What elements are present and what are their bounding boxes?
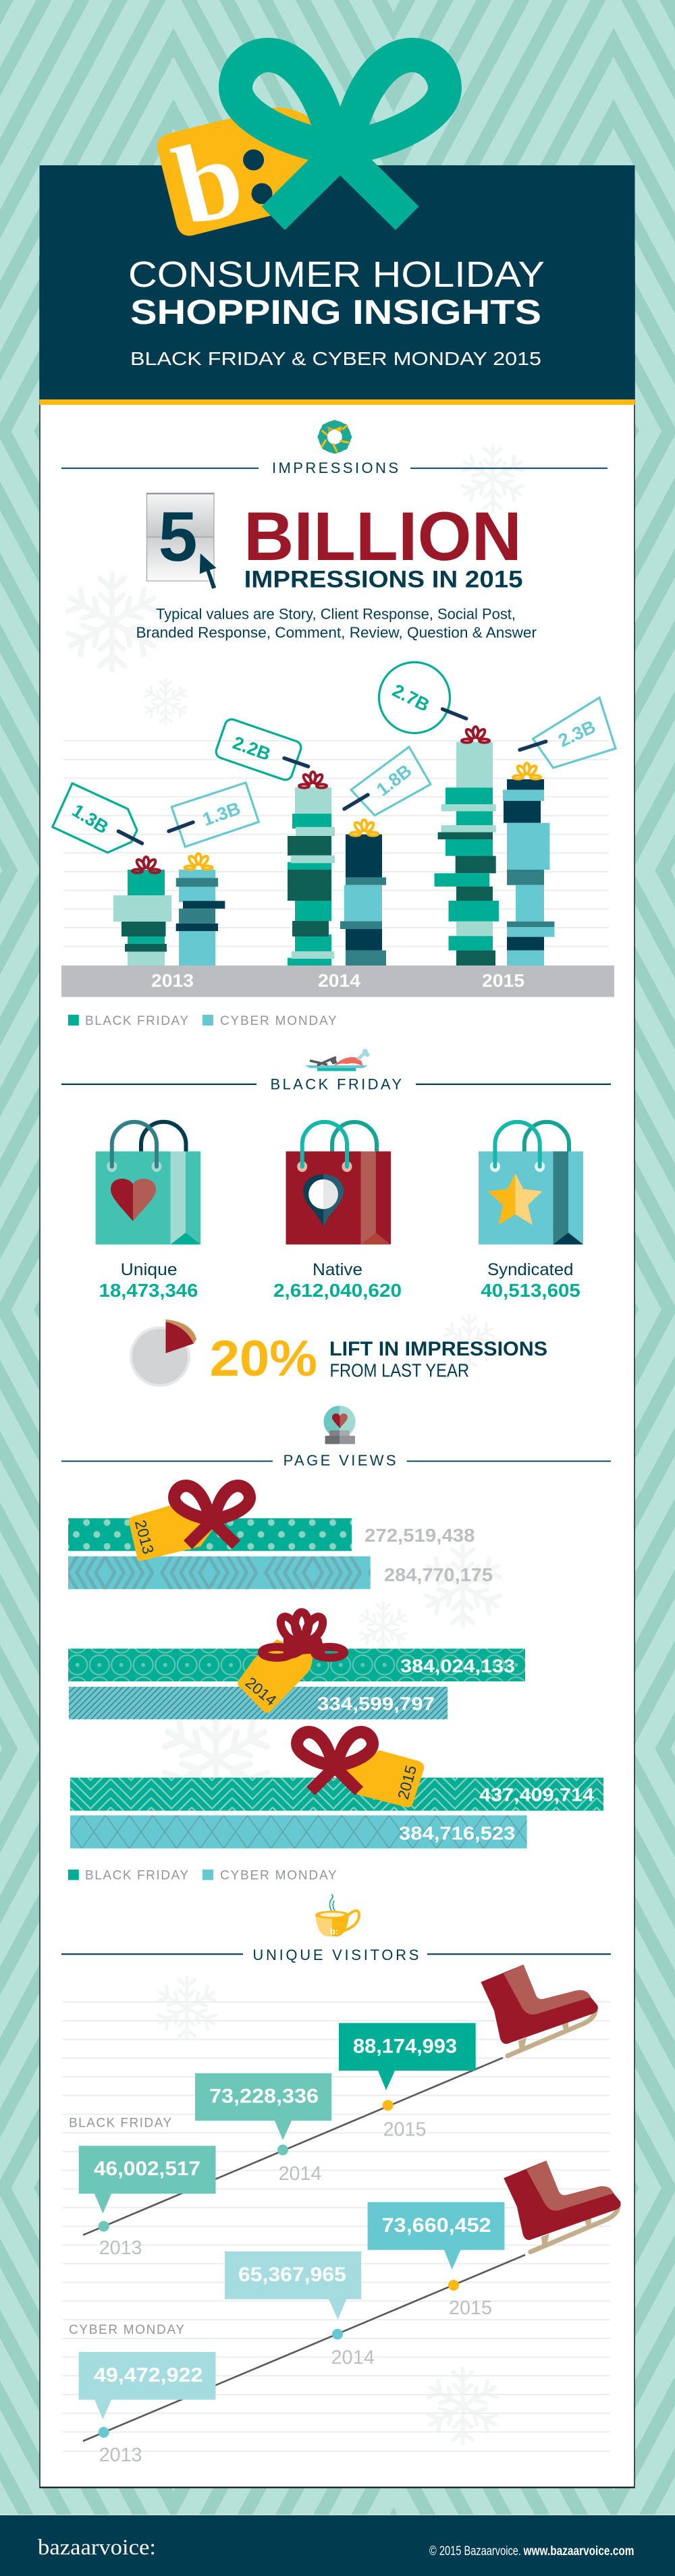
stat: unique: Unique <box>121 1260 178 1279</box>
icon: bag unique <box>96 1122 200 1244</box>
year labels: cyber monday: 2015 <box>449 2297 492 2319</box>
footer logo text: bazaarvoice: <box>38 2536 156 2560</box>
title: SHOPPING INSIGHTS <box>130 293 541 331</box>
tag: 2013 cyber monday 1.3B <box>169 783 259 847</box>
year axis band: 2014 <box>318 970 360 990</box>
legend: impressions chart: BLACK FRIDAY <box>85 1014 188 1028</box>
icon: 2015 red bow <box>291 1726 379 1795</box>
value: 2014 cyber monday: 334,599,797 <box>317 1693 435 1714</box>
icon: snow globe <box>324 1406 355 1444</box>
stack: 2013 black friday <box>113 870 171 965</box>
description text <box>136 606 537 641</box>
callout: 2015 black friday: 88,174,993 <box>353 2035 457 2057</box>
tag: 2015 black friday 2.7B <box>379 663 466 733</box>
tag: 2015 cyber monday 2.3B <box>520 698 616 768</box>
stat: 20 percent lift: 20% <box>210 1330 317 1387</box>
stack: 2015 cyber monday <box>503 779 554 965</box>
callout: 2015 cyber monday <box>368 2202 504 2270</box>
big stat: 5 billion: BILLION <box>244 498 522 575</box>
stat: native: Native <box>313 1260 362 1279</box>
callout: 2015 cyber monday: 73,660,452 <box>382 2214 491 2237</box>
icon: pie <box>130 1320 196 1387</box>
value: 2013 cyber monday: 284,770,175 <box>384 1565 493 1586</box>
stat: native: 2,612,040,620 <box>273 1280 402 1301</box>
icon: coffee cup: b: <box>330 1926 338 1936</box>
tag: 2013 cyber monday 1.3B: 1.3B <box>200 798 243 830</box>
tag: 2014: 2014 <box>242 1673 280 1709</box>
stack: 2014 black friday <box>288 787 335 965</box>
tag: 2013 <box>129 1505 216 1561</box>
small bows on stacks <box>132 727 541 873</box>
callout: 2015 black friday <box>339 2023 476 2090</box>
heading: page views: PAGE VIEWS <box>284 1452 396 1469</box>
logo gift tag <box>157 107 344 250</box>
description text: Branded Response, Comment, Review, Question & Answer <box>136 624 537 641</box>
icon: flip counter 5: 5 <box>159 498 197 576</box>
legend: impressions chart: CYBER MONDAY <box>220 1014 337 1028</box>
bar: 2014 black friday <box>68 1649 525 1681</box>
year labels: cyber monday: 2013 <box>99 2444 142 2466</box>
tag: 2013 black friday 1.3B: 1.3B <box>69 800 112 838</box>
website: www.bazaarvoice.com <box>523 2544 634 2558</box>
year labels: black friday: 2013 <box>99 2237 142 2259</box>
stat: syndicated <box>481 1260 580 1301</box>
icon: 2014 red bow <box>262 1613 344 1659</box>
background snowflakes <box>64 446 525 2443</box>
heading: black friday: BLACK FRIDAY <box>270 1076 402 1093</box>
label: black friday: BLACK FRIDAY <box>69 2117 171 2131</box>
icon: skate cyber monday <box>504 2160 621 2252</box>
tag: 2014 cyber monday 1.8B <box>344 747 431 816</box>
icon: bag native <box>286 1122 391 1244</box>
footer bar <box>0 2515 675 2576</box>
tag: 2015 cyber monday 2.3B: 2.3B <box>556 717 599 751</box>
header panel <box>39 165 634 405</box>
year axis band <box>61 965 614 997</box>
stat: syndicated: 40,513,605 <box>481 1280 580 1301</box>
legend: page views <box>68 1869 337 1883</box>
value: 2015 black friday: 437,409,714 <box>479 1784 594 1805</box>
stack: 2014 cyber monday <box>340 835 386 965</box>
panel: white content card <box>39 256 634 2488</box>
icon: skate black friday <box>481 1965 598 2056</box>
stat: unique: 18,473,346 <box>99 1280 198 1301</box>
tag: 2015: 2015 <box>394 1764 420 1801</box>
tag: 2014 <box>238 1640 313 1713</box>
callout: 2013 black friday: 46,002,517 <box>94 2158 200 2180</box>
tag: 2014 cyber monday 1.8B: 1.8B <box>373 760 416 800</box>
bar: 2014 cyber monday <box>69 1687 448 1719</box>
bar: 2015 cyber monday <box>70 1816 527 1849</box>
callout: 2014 black friday <box>195 2073 331 2140</box>
icon: coffee cup <box>315 1895 359 1936</box>
bar: 2013 black friday <box>68 1518 352 1551</box>
value: 2015 cyber monday: 384,716,523 <box>399 1823 515 1843</box>
callout: 2013 black friday <box>79 2146 216 2214</box>
tag: 2014 black friday 2.2B <box>214 717 308 782</box>
title: CONSUMER HOLIDAY <box>128 254 545 295</box>
icon: bag syndicated <box>479 1122 583 1244</box>
stat: unique <box>99 1260 198 1301</box>
icon: flip counter 5 <box>147 493 217 589</box>
icon: wreath <box>317 420 352 453</box>
callout: 2013 cyber monday <box>79 2352 216 2419</box>
heading: impressions: IMPRESSIONS <box>272 459 398 476</box>
tag: 2013: 2013 <box>132 1518 157 1556</box>
stat: 20 percent lift: FROM LAST YEAR <box>329 1360 469 1380</box>
tag: 2015 black friday 2.7B: 2.7B <box>389 680 433 716</box>
icon: teal bow <box>219 38 462 230</box>
value: 2014 black friday: 384,024,133 <box>400 1655 515 1676</box>
year labels: black friday: 2015 <box>383 2119 426 2140</box>
chart: impressions gift stacks <box>53 663 616 997</box>
year axis band: 2015 <box>482 970 524 990</box>
tag: 2015 <box>338 1750 424 1808</box>
year labels: cyber monday <box>99 2297 492 2466</box>
legend: impressions chart <box>68 1014 337 1028</box>
stat: 20 percent lift <box>210 1330 547 1387</box>
callout: 2014 cyber monday <box>225 2251 361 2320</box>
tag: 2014 black friday 2.2B: 2.2B <box>230 733 273 764</box>
year axis band: 2013 <box>151 970 194 990</box>
chart: unique visitors <box>62 1965 621 2466</box>
heading: unique visitors: UNIQUE VISITORS <box>252 1947 418 1963</box>
trend line: cyber monday <box>83 2255 525 2441</box>
year labels: black friday: 2014 <box>279 2163 321 2185</box>
copyright: © 2015 Bazaarvoice. <box>429 2544 521 2558</box>
year labels: black friday <box>99 2119 426 2259</box>
icon: 2013 red bow <box>168 1480 256 1549</box>
icon: turkey plate <box>305 1048 370 1071</box>
bar: 2013 cyber monday <box>68 1557 371 1589</box>
label: cyber monday: CYBER MONDAY <box>69 2323 184 2337</box>
title <box>128 254 545 369</box>
logo gift tag: b <box>163 113 254 250</box>
stat: 20 percent lift: LIFT IN IMPRESSIONS <box>329 1338 547 1360</box>
trend line: black friday <box>83 2058 503 2235</box>
stat: native <box>273 1260 402 1301</box>
tag: 2013 black friday 1.3B <box>53 783 142 853</box>
bar: 2015 black friday <box>70 1778 603 1811</box>
stat: syndicated: Syndicated <box>487 1260 574 1279</box>
callout: 2014 black friday: 73,228,336 <box>209 2085 319 2107</box>
callout: 2014 cyber monday: 65,367,965 <box>238 2264 346 2286</box>
callout: 2013 cyber monday: 49,472,922 <box>94 2364 202 2386</box>
legend: page views: BLACK FRIDAY <box>85 1869 188 1883</box>
legend: page views: CYBER MONDAY <box>220 1869 337 1883</box>
stack: 2013 cyber monday <box>176 870 225 965</box>
year labels: cyber monday: 2014 <box>331 2347 375 2368</box>
stack: 2015 black friday <box>435 742 499 965</box>
value: 2013 black friday: 272,519,438 <box>364 1525 475 1546</box>
description text: Typical values are Story, Client Response, Social Post, <box>156 606 516 623</box>
title: BLACK FRIDAY & CYBER MONDAY 2015 <box>130 348 541 369</box>
big stat: 5 billion: IMPRESSIONS IN 2015 <box>244 567 523 593</box>
